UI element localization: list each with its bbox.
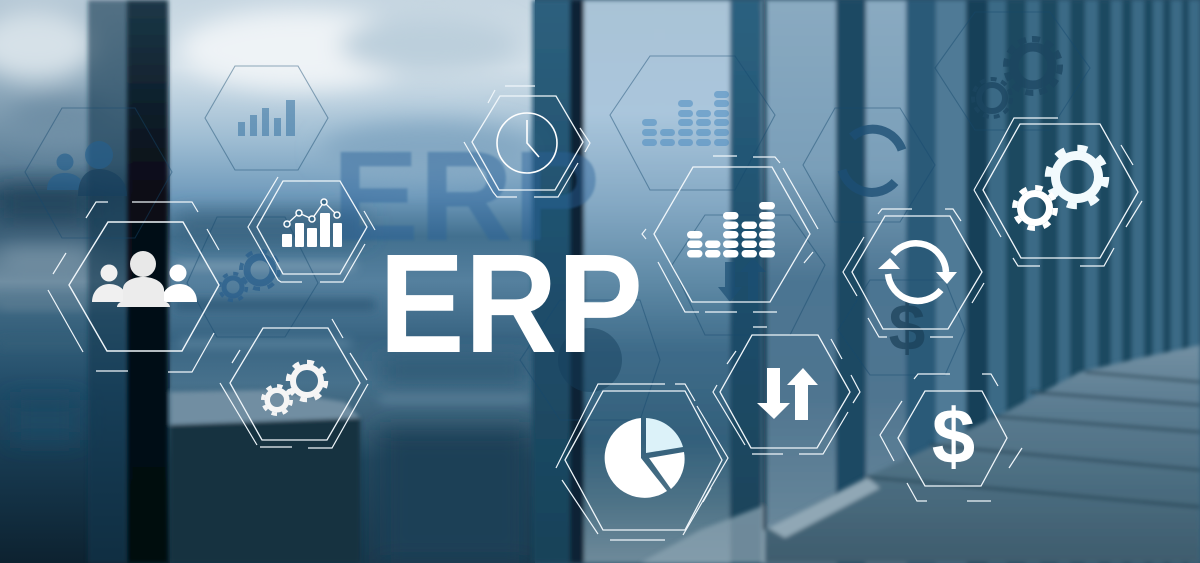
- icon: people hexagon: [48, 202, 219, 372]
- ghost chart bars top-left: [238, 100, 295, 136]
- ghost gears: [220, 39, 1060, 300]
- ghost hexagons: [25, 12, 1090, 420]
- icon: dollar hexagon: [880, 374, 1022, 501]
- title: ERP: [379, 224, 643, 382]
- icon: gears hexagon (right): [974, 118, 1142, 266]
- ghost pie chart: [558, 328, 622, 392]
- icon: clock hexagon: [464, 86, 590, 197]
- ghost people icon: [47, 141, 127, 196]
- ghost cycle arrows: [842, 129, 902, 192]
- ghost ERP text reflection: ERP: [332, 125, 600, 268]
- ghost arrows: [718, 258, 766, 302]
- icon: bar chart hexagon: [248, 177, 375, 282]
- ghost dollar sign: $: [889, 290, 925, 364]
- icon: cycle arrows hexagon: [843, 209, 984, 337]
- icon: pie chart hexagon: [556, 384, 728, 540]
- icon: dollar hexagon: $: [932, 392, 975, 480]
- ghost pill bars: [642, 91, 729, 146]
- icon: up down arrows hexagon: [713, 335, 860, 454]
- icon: gears hexagon (left): [220, 319, 368, 448]
- icon: pill bars hexagon: [642, 156, 818, 327]
